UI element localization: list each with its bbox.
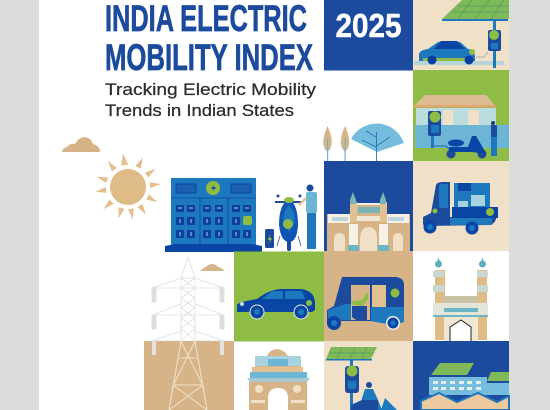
panel: solar car charging [413,0,509,70]
panel: electric auto rickshaw [324,251,413,341]
icon: transmission tower [152,257,224,341]
panel: solar factory [413,341,509,410]
panel: Gateway of India [324,161,413,251]
panel: solar scooter charging [324,341,413,410]
panel: charging station with scooter [413,70,509,161]
panel: year 2025 [324,0,413,70]
icon: Charminar [414,251,509,341]
subtitle: Trends in Indian States [105,102,294,120]
title: MOBILITY INDEX [105,36,313,78]
subtitle: Tracking Electric Mobility [105,81,317,99]
title [105,0,313,78]
panel: tan tower base [144,341,234,410]
panel: India Gate [247,349,310,410]
icon: battery pack [265,229,274,248]
panel: year 2025: 2025 [336,7,402,44]
panel: green car [234,252,324,342]
icon: small cloud [200,264,225,271]
icon: sun [95,153,161,220]
icon: battery swap station [165,178,262,252]
subtitle [105,81,317,120]
icon: trees [323,124,404,161]
panel: electric truck [413,161,509,251]
icon: scooter with rider [275,184,317,251]
icon: cloud [62,137,100,152]
